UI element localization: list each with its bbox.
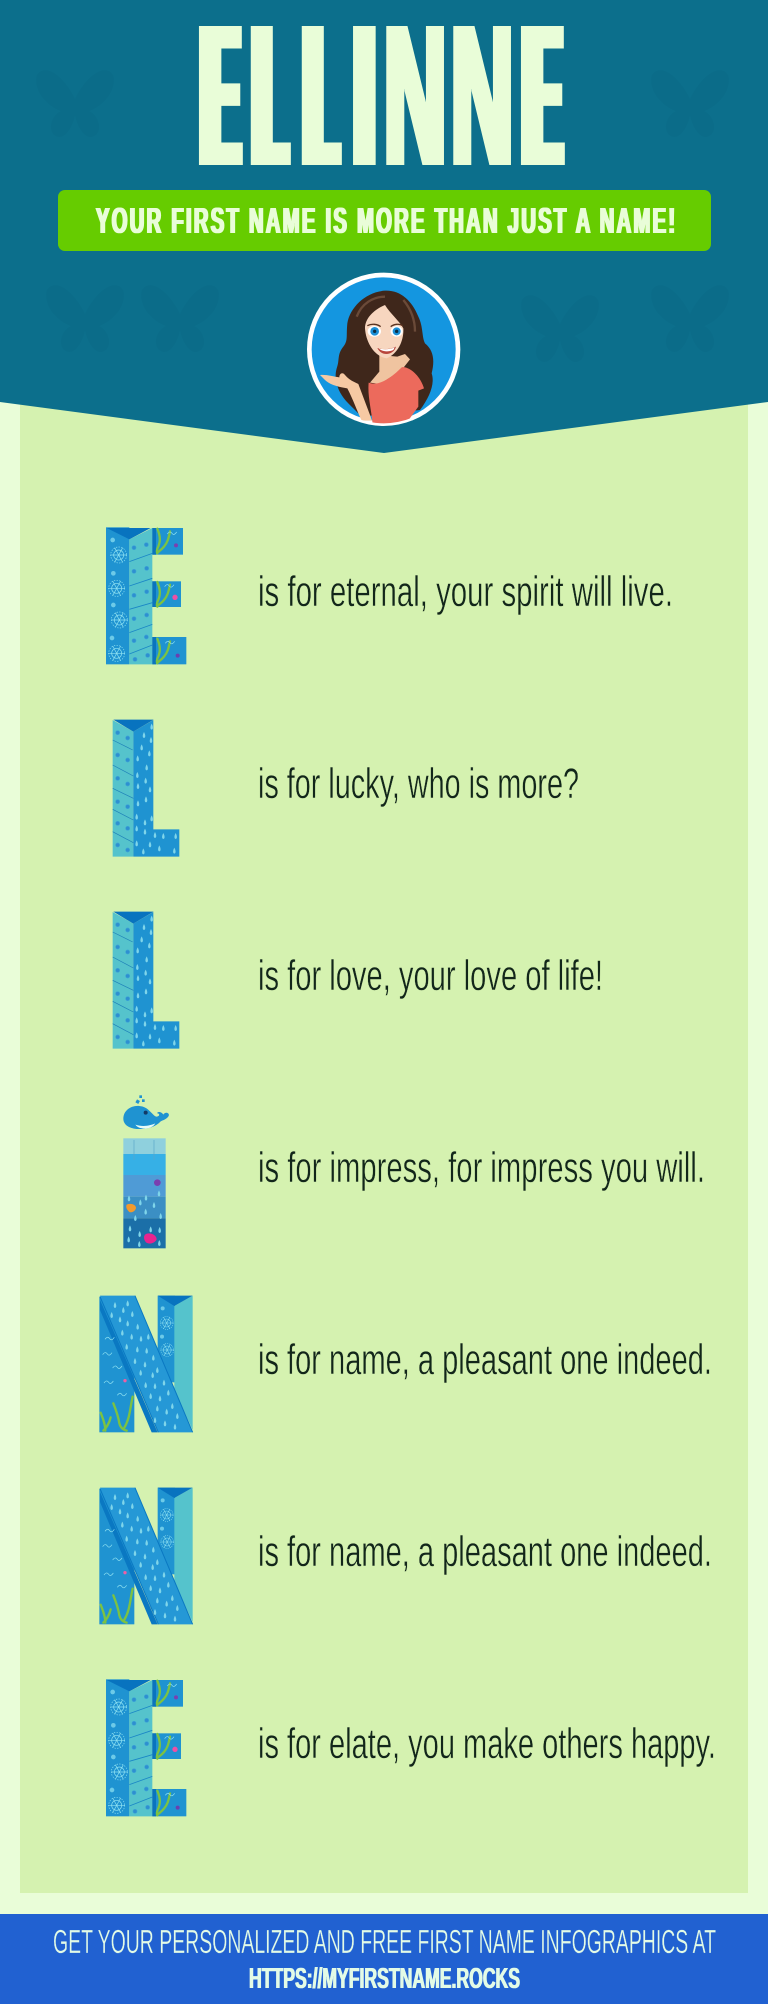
row 3 icon: letter L	[113, 912, 179, 1049]
subtitle banner	[58, 190, 711, 251]
panel: light green content area	[20, 380, 748, 1893]
subtitle text: YOUR FIRST NAME IS MORE THAN JUST A NAME!	[96, 202, 675, 242]
footer band	[0, 1914, 768, 2004]
title: ELLINNE	[198, 0, 565, 208]
footer URL: HTTPS://MYFIRSTNAME.ROCKS	[249, 1963, 520, 1995]
panel: teal chevron header	[0, 0, 768, 453]
row 4 icon: letter I with whale	[123, 1095, 169, 1248]
row 1 icon: letter E	[106, 527, 186, 664]
header texture: faint butterflies	[36, 70, 729, 362]
row 7 icon: letter E	[106, 1679, 186, 1816]
row 2 icon: letter L	[113, 720, 179, 857]
avatar: woman in circle	[307, 273, 460, 426]
row 6 icon: letter N	[99, 1488, 193, 1624]
row 2 text: is for lucky, who is more?	[258, 760, 579, 808]
row 5 icon: letter N	[99, 1296, 193, 1432]
row 3 text: is for love, your love of life!	[258, 952, 603, 1000]
